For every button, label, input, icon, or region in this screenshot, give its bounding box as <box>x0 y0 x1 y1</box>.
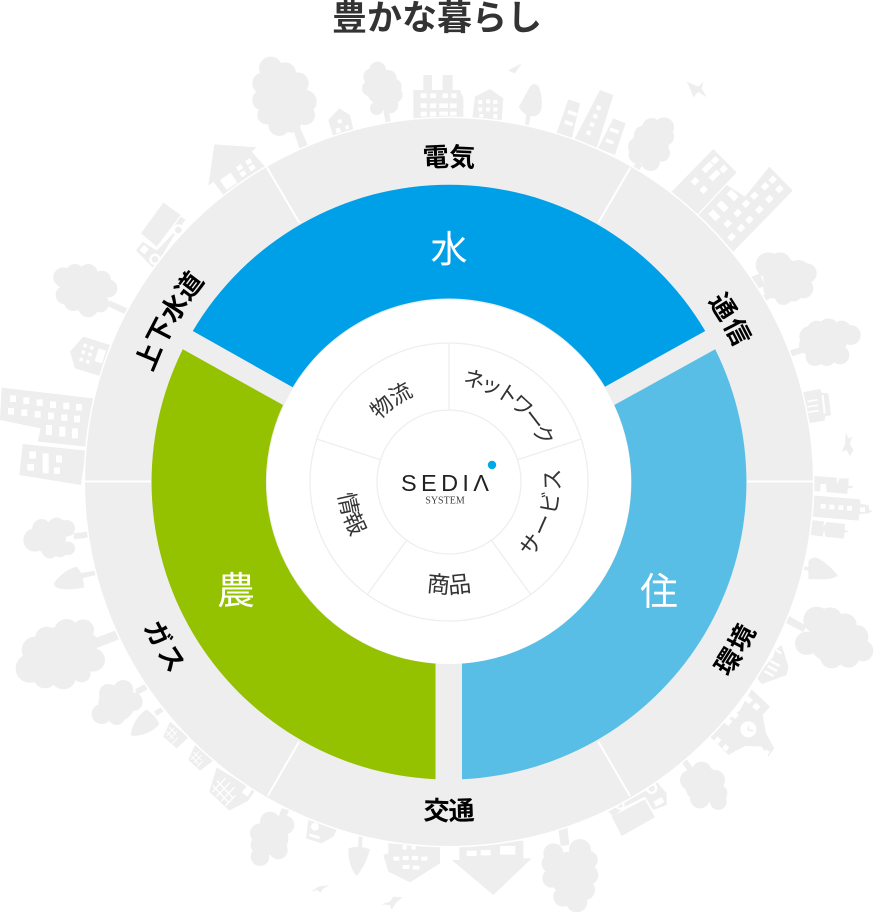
icon: tree sideways <box>23 518 89 558</box>
icon: stepped buildings <box>809 476 873 539</box>
ring label: telecom: 通信 <box>708 291 752 346</box>
icon: diagonal office building large <box>698 167 793 252</box>
icon: small house <box>163 722 188 748</box>
icon: house with arrow roof <box>208 144 265 195</box>
inner label: information: 情報 <box>337 492 368 537</box>
inner label: logistics: 物流 <box>369 382 414 418</box>
ring dividers <box>85 167 813 796</box>
ring label: water and sewage: 上下水道 <box>136 270 206 372</box>
icon: bird <box>687 82 707 97</box>
panel: white centre <box>267 300 631 664</box>
icon: large tree sideways <box>16 619 119 689</box>
icon: town hall with clock <box>710 689 774 757</box>
icon: house bottom <box>383 843 440 882</box>
icon: tall buildings <box>557 90 626 155</box>
icon: tree <box>250 808 294 866</box>
icon: spade tree <box>54 567 96 589</box>
icon: spade tree <box>348 837 370 876</box>
icon: office buildings <box>0 388 93 447</box>
outer gray ring backing <box>84 116 814 848</box>
city silhouette: bottom-right <box>452 558 873 912</box>
icon: apartment block left part <box>413 75 440 118</box>
icon: tree <box>542 827 598 912</box>
icon: small block house <box>70 337 110 376</box>
title: 豊かな暮らし <box>332 0 542 38</box>
ring label: environment: 環境 <box>712 622 757 676</box>
icon: house <box>472 89 503 120</box>
inner label: products: 商品 <box>428 573 470 596</box>
segment label: agriculture: 農 <box>217 571 255 613</box>
icon: truck <box>136 203 186 267</box>
city silhouette: top-right <box>439 63 861 366</box>
panel: housing segment <box>462 349 746 779</box>
logo: SEDIA SYSTEM <box>401 461 496 506</box>
icon: tree <box>680 758 727 810</box>
icon: truck <box>608 782 667 836</box>
icon: tree <box>628 117 674 171</box>
icon: small house <box>328 108 353 137</box>
ring label: gas: ガス <box>144 621 184 672</box>
icon: arrow-shaped house <box>452 841 532 895</box>
icon: tree <box>362 62 403 123</box>
panel: water segment <box>193 185 705 387</box>
panel: outer ring <box>85 118 813 846</box>
ring label: electricity: 電気 <box>424 144 474 169</box>
icon: small dome building <box>756 645 788 684</box>
icon: apartment block right part <box>439 75 463 117</box>
city silhouette: top-left <box>0 57 440 485</box>
logo: SEDIA SYSTEM: SEDIΛ <box>401 470 489 496</box>
icon: bird <box>311 885 330 893</box>
icon: tree sideways <box>789 318 861 366</box>
segment label: water: 水 <box>430 229 468 270</box>
icon: small ornament building <box>306 820 337 843</box>
logo: SEDIA SYSTEM: SYSTEM <box>425 496 465 506</box>
icon: tree sideways <box>750 252 817 305</box>
panel: agriculture segment <box>152 349 436 779</box>
icon: spade tree <box>519 84 542 125</box>
icon: tree sideways <box>92 680 147 725</box>
city silhouette: bottom-left <box>16 518 440 910</box>
icon: small house <box>188 745 213 771</box>
icon: diagonal office building <box>672 149 737 215</box>
icon: large tree <box>252 57 317 150</box>
segment label: housing: 住 <box>640 572 678 614</box>
icon: large tree sideways <box>785 607 873 668</box>
icon: striped building <box>802 389 831 423</box>
icon: spade tree <box>803 558 837 579</box>
icon: lower office building <box>19 444 86 485</box>
ring label: transport: 交通 <box>424 798 474 822</box>
icon: large house <box>209 767 255 811</box>
icon: bird <box>842 433 853 456</box>
icon: spade tree <box>131 707 163 736</box>
icon: tree sideways <box>53 264 127 317</box>
inner label: network: ネットワーク <box>465 370 552 440</box>
inner wheel lines <box>310 343 588 621</box>
city silhouette: right side <box>802 389 873 539</box>
icon: bird <box>501 63 522 75</box>
icon: bird <box>381 897 403 910</box>
inner label: service: サービス <box>520 470 561 552</box>
